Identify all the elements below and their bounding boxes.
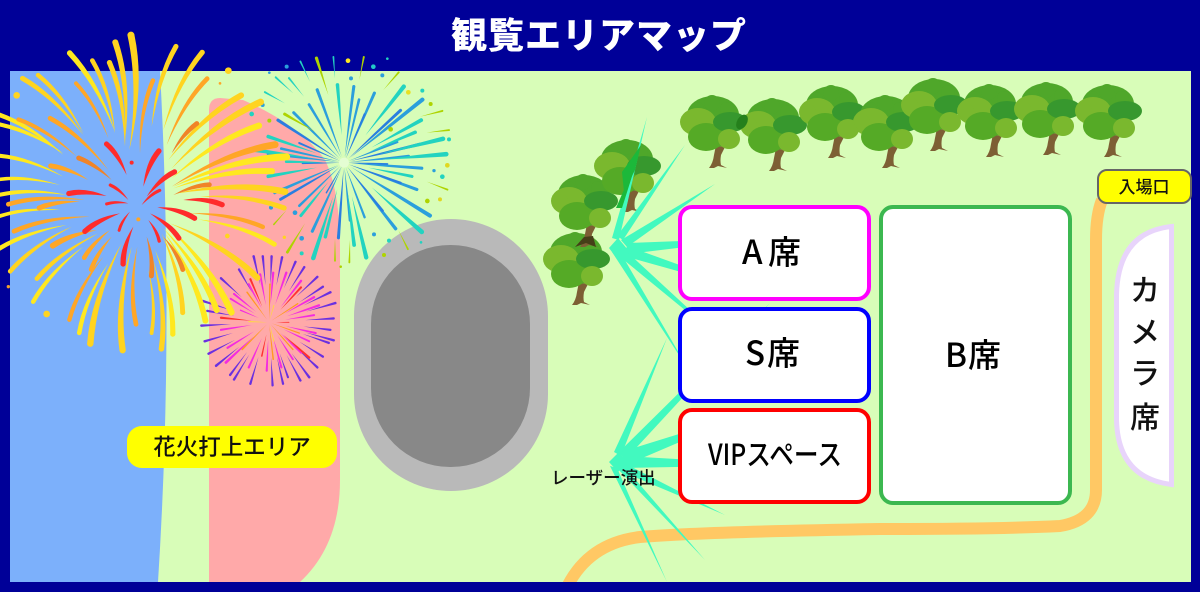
seat block: B: B: [945, 329, 967, 377]
laser fan: lower: [609, 303, 780, 582]
fireworks launch area: [209, 98, 340, 582]
sea area: [10, 71, 167, 582]
firework: large gold and red: [0, 32, 291, 354]
camera seats: [1116, 226, 1172, 484]
firework: blue: [249, 56, 451, 268]
trees: left cluster: [543, 139, 661, 305]
seat block: VIP: [680, 410, 869, 502]
seat block: VIP: VIPスペース: [707, 432, 842, 474]
seat block: S: [680, 309, 869, 401]
camera seats: ラ: [1130, 349, 1160, 393]
camera seats: 席: [1130, 393, 1160, 437]
camera seats: メ: [1130, 308, 1160, 352]
camera seats: カ: [1130, 266, 1160, 310]
launch area label: [127, 426, 337, 468]
seat block: B: [881, 207, 1070, 503]
walkway: [568, 200, 1102, 585]
firework: pink: [200, 255, 337, 387]
laser fan: upper: [609, 117, 760, 372]
seat block: A: [680, 207, 869, 299]
launch area label: 花火打上エリア: [153, 430, 311, 462]
oval track: [354, 219, 548, 491]
seat block: S: 席: [767, 327, 800, 375]
trees: top row: [680, 78, 1142, 171]
laser label: レーザー演出: [551, 465, 656, 490]
seat block: A: A: [742, 226, 763, 274]
seat block: S: S: [745, 327, 765, 375]
seat block: A: 席: [768, 226, 801, 274]
entrance label: [1098, 170, 1191, 203]
entrance label: 入場口: [1118, 173, 1170, 198]
title: 観覧エリアマップ: [451, 7, 747, 59]
bottom border strip: [0, 582, 1200, 592]
seat block: B: 席: [968, 329, 1001, 377]
